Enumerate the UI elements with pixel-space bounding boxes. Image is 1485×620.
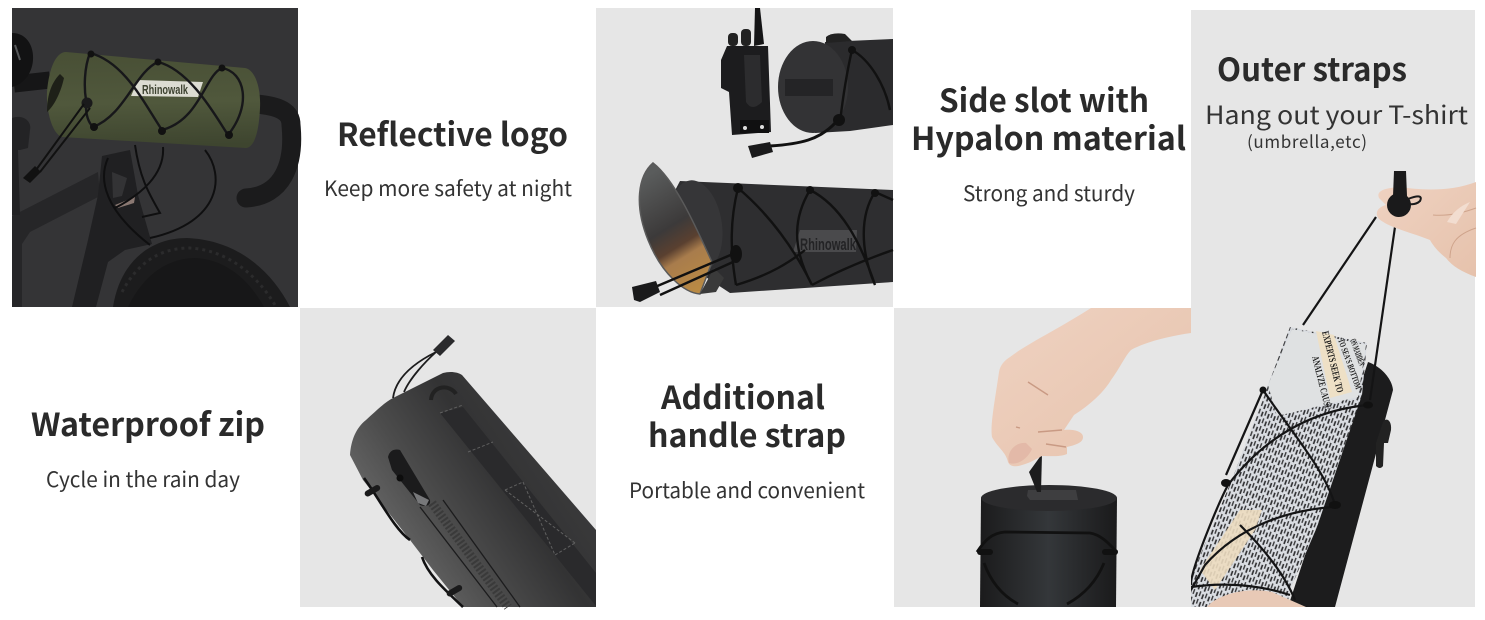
icon: newspaper print fabric: EXPERTS SEEK TO: [1319, 330, 1345, 394]
D-ring: [431, 387, 456, 400]
elastic cords: [732, 188, 893, 285]
panel: handle strap demonstration: [894, 308, 1191, 607]
icon: sunglasses tucked under strap: [632, 163, 893, 302]
icon: strap tab: [1029, 454, 1042, 492]
heading: Additional handle strap: [629, 373, 865, 505]
icon: newspaper print fabric: [1191, 327, 1367, 607]
panel: side slot product photo: [596, 8, 893, 307]
icon: hand holding cord lock: [1377, 171, 1476, 277]
panel: outer straps demonstration: [1191, 10, 1476, 607]
heading: Additional handle strap: handle strap: [648, 411, 846, 457]
caption: Strong and sturdy: [963, 178, 1135, 208]
icon: bicycle frame: [12, 150, 152, 307]
caption: Portable and convenient: [629, 475, 865, 505]
icon: front wheel: [113, 238, 290, 307]
icon: black bag with strap on end: [748, 33, 893, 158]
heading: Outer straps: Outer straps: [1217, 45, 1407, 91]
heading: Waterproof zip: [31, 400, 265, 494]
icon: black cylinder bag top: [977, 485, 1118, 607]
icon: newspaper print fabric: ANALYZE CAUSE: [1309, 355, 1333, 411]
bag logo: [793, 230, 857, 254]
caption: Hang out your T-shirt: [1205, 96, 1469, 132]
panel: waterproof zip product photo: [300, 308, 596, 607]
icon: black bag body: [1288, 362, 1393, 607]
heading: Reflective logo: Reflective logo: [337, 110, 568, 156]
icon: hand pulling strap: [992, 308, 1191, 466]
shoulder strap: [440, 407, 596, 606]
elastic cords: [1191, 217, 1396, 600]
caption: Keep more safety at night: [324, 173, 572, 203]
bag logo: Rhinowalk: [800, 235, 856, 254]
heading: Side slot with Hypalon material: [911, 76, 1186, 208]
reflective logo: Rhinowalk: [142, 82, 189, 97]
heading: Additional handle strap: Additional: [660, 373, 825, 419]
panel: bag on bicycle at night: [12, 8, 298, 307]
heading: Side slot with Hypalon material: Side slot with: [939, 76, 1149, 122]
heading: Waterproof zip: Waterproof zip: [31, 400, 265, 446]
icon: drop handlebar: [12, 33, 292, 215]
heading: Reflective logo: [324, 110, 572, 203]
caption: Cycle in the rain day: [46, 464, 240, 494]
stitching: [440, 405, 575, 555]
heading: Side slot with Hypalon material: Hypalon material: [911, 114, 1186, 160]
zip pull: [388, 450, 430, 506]
cord and toggle: [393, 352, 436, 398]
cable loops: [104, 145, 216, 245]
icon: fingers at bag bottom: [1207, 590, 1306, 607]
icon: black bag with zip: [350, 335, 596, 607]
icon: green handlebar bag: [23, 50, 260, 183]
icon: newspaper print fabric: ON MADDEN: [1348, 337, 1367, 367]
elastic cords: [85, 53, 243, 135]
icon: newspaper print fabric: TO SEA'S BOTTOM: [1336, 337, 1364, 391]
sub-caption: (umbrella,etc): [1247, 128, 1367, 153]
icon: side clip: [1376, 420, 1391, 468]
zip line: [420, 500, 520, 607]
icon: walkie-talkie: [721, 8, 771, 135]
